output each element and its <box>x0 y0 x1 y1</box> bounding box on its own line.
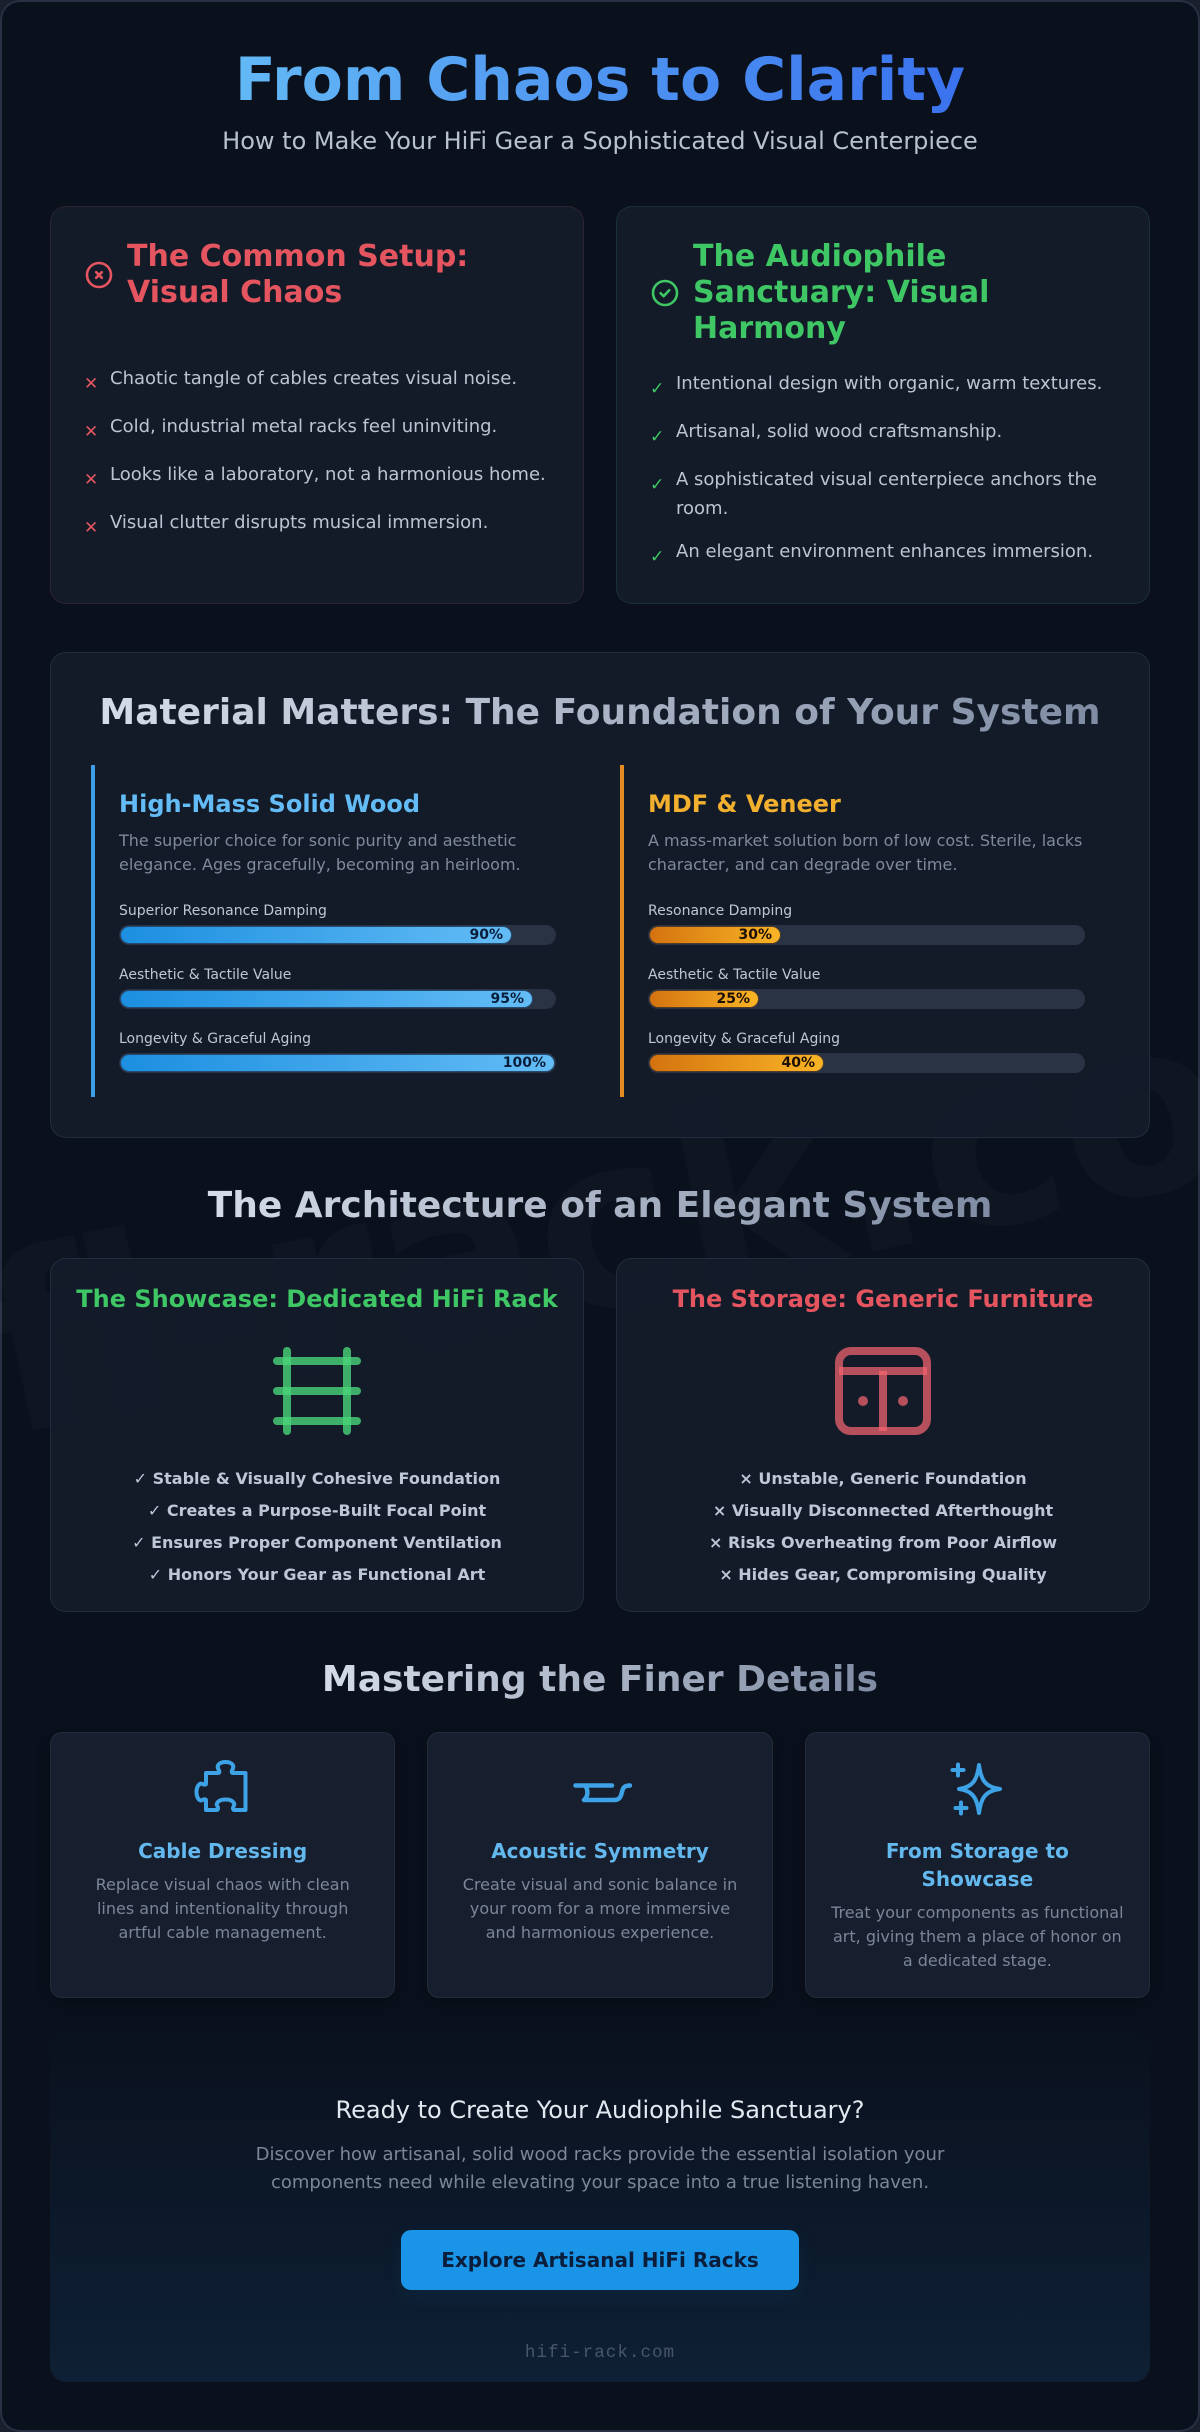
bar 40%: 40% <box>781 1055 815 1071</box>
heading: visual harmony: Harmony <box>693 311 846 346</box>
heading: visual harmony: Sanctuary: Visual <box>693 275 989 310</box>
bar 30%: 30% <box>738 927 772 943</box>
list: chaos points: ✕ <box>84 422 98 442</box>
list: storage drawbacks <box>709 1468 1057 1584</box>
panel: call to action <box>50 2035 1150 2382</box>
button: Explore Artisanal HiFi Racks <box>441 2248 759 2272</box>
list: showcase benefits: ✓ Stable & Visually Cohesive Foundation <box>134 1468 500 1488</box>
heading <box>886 1839 1069 1891</box>
heading: mdf veneer: MDF & Veneer <box>648 790 841 818</box>
metric: resonance damping <box>648 903 1085 945</box>
panel: storage <box>616 1258 1150 1612</box>
list: storage drawbacks: × Visually Disconnected Afterthought <box>713 1500 1053 1520</box>
bar 25%: 25% <box>716 991 750 1007</box>
metric: aesthetic value <box>648 967 1085 1009</box>
list: chaos points <box>84 368 546 538</box>
card: storage to showcase <box>805 1732 1150 1998</box>
list: storage drawbacks: × Unstable, Generic Foundation <box>739 1468 1027 1488</box>
bar 95%: 95% <box>490 991 524 1007</box>
icon: acoustic <box>573 1783 632 1802</box>
icon: x circle <box>86 262 112 288</box>
label: Resonance Damping <box>648 903 792 919</box>
heading: Cable Dressing <box>138 1839 307 1863</box>
heading: visual harmony: The Audiophile <box>693 239 946 274</box>
heading: solid wood: High-Mass Solid Wood <box>119 790 420 818</box>
description: elegance. Ages gracefully, becoming an heirloom. <box>119 855 521 874</box>
heading: From Storage to <box>886 1839 1069 1863</box>
heading: finer details: Mastering the Finer Details <box>322 1659 878 1700</box>
heading: material matters: Material Matters: The Foundation of Your System <box>99 692 1101 733</box>
heading: visual chaos: The Common Setup: <box>127 239 468 274</box>
description: cta: Discover how artisanal, solid wood racks provide the essential isolation your <box>256 2144 944 2164</box>
subtitle: How to Make Your HiFi Gear a Sophisticated Visual Centerpiece <box>222 127 978 155</box>
bar 30% <box>648 925 1085 945</box>
list: showcase benefits: ✓ Ensures Proper Component Ventilation <box>132 1532 502 1552</box>
icon: puzzle <box>194 1760 248 1812</box>
heading: visual chaos <box>127 239 468 310</box>
panel: audiophile sanctuary <box>616 206 1150 604</box>
list: showcase benefits <box>132 1468 502 1584</box>
column: mdf veneer <box>620 765 1085 1097</box>
card: acoustic symmetry <box>427 1732 773 1998</box>
metric: resonance damping <box>119 903 556 945</box>
bar 90%: 90% <box>469 927 503 943</box>
list: chaos points: ✕ <box>84 470 98 490</box>
description: art, giving them a place of honor on <box>833 1927 1122 1946</box>
list: harmony points <box>650 373 1102 567</box>
description: lines and intentionality through <box>97 1899 348 1918</box>
list item <box>650 469 1097 519</box>
icon: check circle <box>652 280 678 306</box>
list: storage drawbacks: × Risks Overheating from Poor Airflow <box>709 1532 1057 1552</box>
description: A mass-market solution born of low cost. Sterile, lacks <box>648 831 1082 850</box>
description: cta: components need while elevating your space into a true listening haven. <box>271 2172 929 2192</box>
list: harmony points: ✓ <box>650 547 664 567</box>
heading: visual harmony <box>693 239 989 346</box>
description: character, and can degrade over time. <box>648 855 957 874</box>
heading: showcase: The Showcase: Dedicated HiFi Rack <box>76 1285 558 1313</box>
label: Superior Resonance Damping <box>119 903 327 919</box>
list item: Visual clutter disrupts musical immersion. <box>110 512 488 533</box>
description: The superior choice for sonic purity and aesthetic <box>119 831 516 850</box>
footer url: hifi-rack.com <box>525 2342 675 2362</box>
panel: common setup <box>50 206 584 604</box>
accent bar <box>91 765 95 1097</box>
description <box>831 1903 1124 1970</box>
heading: Showcase <box>921 1867 1033 1891</box>
panel: material matters <box>50 652 1150 1138</box>
card: cable dressing <box>50 1732 395 1998</box>
description: Replace visual chaos with clean <box>96 1875 350 1894</box>
description: cta <box>256 2144 944 2192</box>
bar 100%: 100% <box>503 1055 546 1071</box>
description: and harmonious experience. <box>486 1923 714 1942</box>
bar 90% <box>119 925 556 945</box>
description: artful cable management. <box>118 1923 327 1942</box>
heading: visual chaos: Visual Chaos <box>127 275 342 310</box>
heading: Acoustic Symmetry <box>491 1839 709 1863</box>
description <box>96 1875 350 1942</box>
list: harmony points: ✓ <box>650 379 664 399</box>
accent bar <box>620 765 624 1097</box>
icon: sparkles <box>950 1762 1002 1816</box>
description <box>463 1875 737 1942</box>
description: your room for a more immersive <box>470 1899 730 1918</box>
bar 40% <box>648 1053 1085 1073</box>
list: showcase benefits: ✓ Honors Your Gear as Functional Art <box>149 1564 485 1584</box>
icon: rack <box>273 1347 361 1435</box>
bar 100% <box>119 1053 556 1073</box>
list item: Intentional design with organic, warm textures. <box>676 373 1102 394</box>
list: showcase benefits: ✓ Creates a Purpose-Built Focal Point <box>148 1500 486 1520</box>
column: solid wood <box>91 765 556 1097</box>
description <box>118 831 521 874</box>
bar 95% <box>119 989 556 1009</box>
label: Longevity & Graceful Aging <box>119 1031 311 1047</box>
metric: aesthetic value <box>119 967 556 1009</box>
list: chaos points: ✕ <box>84 518 98 538</box>
label: Aesthetic & Tactile Value <box>119 967 291 983</box>
icon: cabinet <box>835 1347 931 1435</box>
list: chaos points: ✕ <box>84 374 98 394</box>
metric: longevity <box>119 1031 556 1073</box>
metric: longevity <box>648 1031 1085 1073</box>
list: harmony points: ✓ <box>650 475 664 495</box>
description: Treat your components as functional <box>831 1903 1124 1922</box>
description <box>648 831 1082 874</box>
description: a dedicated stage. <box>903 1951 1052 1970</box>
title: From Chaos to Clarity <box>235 45 965 115</box>
bar 25% <box>648 989 1085 1009</box>
description: Create visual and sonic balance in <box>463 1875 737 1894</box>
heading: storage: The Storage: Generic Furniture <box>673 1285 1093 1313</box>
label: Aesthetic & Tactile Value <box>648 967 820 983</box>
list item: Artisanal, solid wood craftsmanship. <box>676 421 1002 442</box>
list item: An elegant environment enhances immersion. <box>676 541 1093 562</box>
panel: showcase <box>50 1258 584 1612</box>
heading: cta: Ready to Create Your Audiophile Sanctuary? <box>336 2096 864 2124</box>
list item: A sophisticated visual centerpiece anchors the <box>676 469 1097 490</box>
button <box>401 2230 799 2290</box>
list item: room. <box>676 498 728 519</box>
list item: Looks like a laboratory, not a harmonious home. <box>110 464 546 485</box>
heading: architecture: The Architecture of an Elegant System <box>208 1185 992 1226</box>
list: storage drawbacks: × Hides Gear, Compromising Quality <box>719 1564 1047 1584</box>
label: Longevity & Graceful Aging <box>648 1031 840 1047</box>
list item: Chaotic tangle of cables creates visual noise. <box>110 368 517 388</box>
list item: Cold, industrial metal racks feel uninviting. <box>110 416 497 437</box>
list: harmony points: ✓ <box>650 427 664 447</box>
